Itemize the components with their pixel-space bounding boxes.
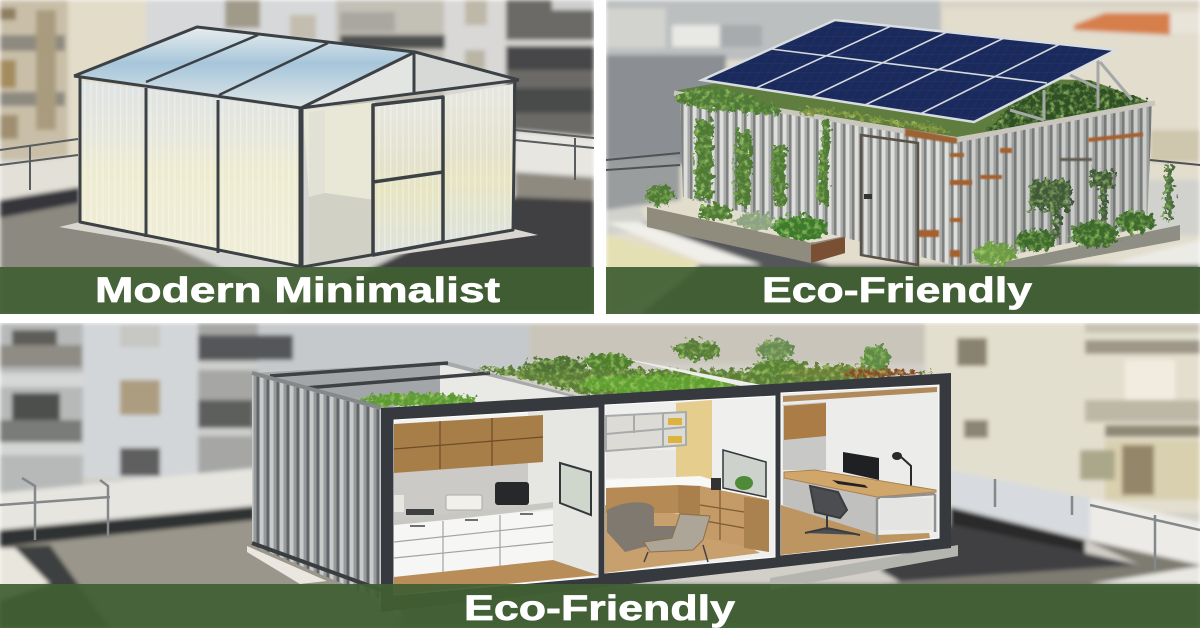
wood shelf [784,403,826,440]
monitor [843,452,879,480]
corrugated side wall [252,375,381,600]
heading: Modern Minimalist: Modern Minimalist [95,271,500,310]
armchair [644,514,710,552]
greenhouse [74,27,519,267]
roof garden foliage [360,339,935,407]
wood floor [781,505,930,555]
railing [0,478,1200,570]
panel: eco-friendly modular interior [0,323,1200,628]
shelves [606,412,686,451]
white drawers [394,510,553,577]
side glass and door [375,96,443,255]
solar panels [702,20,1116,122]
wood floor [605,505,760,573]
panel: modern minimalist [0,0,594,314]
concrete base slab [60,222,538,256]
panel: eco-friendly solar container [606,0,1200,314]
parapet and floor tones [0,155,80,200]
glass roof [74,27,415,108]
wood base cabinets [606,485,678,513]
label band [0,267,594,314]
countertop [606,476,770,501]
heading: Eco-Friendly: Eco-Friendly [464,589,736,628]
solar supports [1010,60,1132,120]
office chair [805,486,860,535]
room: kitchen [394,408,598,595]
wooden desk [784,470,936,497]
interior back wall and floor [303,102,375,200]
dark frame [74,27,519,267]
door handle [864,194,872,199]
door [861,135,918,265]
left planter [647,207,845,263]
desk plant and glass [723,450,766,497]
wood floor [394,560,598,595]
sink and appliances [394,495,404,512]
label band [606,267,1200,314]
upper wood cabinets [394,415,543,473]
background: blurred buildings [0,323,1200,628]
dark outer frame [381,373,951,612]
yellow accent wall [676,400,712,480]
right garden plants [973,165,1173,265]
container open roof [252,362,600,408]
wall window [560,463,591,515]
climbing plants [646,87,950,241]
sofa [607,502,676,552]
backsplash [606,450,676,478]
container walls [680,93,957,266]
heading: Eco-Friendly: Eco-Friendly [762,271,1033,310]
parapet and roof floor tones [0,468,255,530]
room: lounge and kitchenette [605,396,775,573]
back wall lower grey [783,478,877,540]
roof garden [674,75,1152,137]
railing [0,130,594,190]
label band [0,584,1200,628]
counter [394,502,553,526]
base plinth [770,545,958,584]
background: blurred buildings [606,0,1200,314]
desk lamp [900,456,911,487]
railing [606,153,1200,170]
rust marks [905,128,1143,257]
keyboard [832,480,868,488]
chair legs [644,545,708,562]
roof edge [674,93,1155,140]
background: blurred apartment buildings [0,0,594,314]
front glass wall [80,80,302,265]
right planter [975,225,1180,270]
white plinth strip [247,546,327,584]
room: home office [781,385,939,555]
skylight strip [622,358,762,387]
